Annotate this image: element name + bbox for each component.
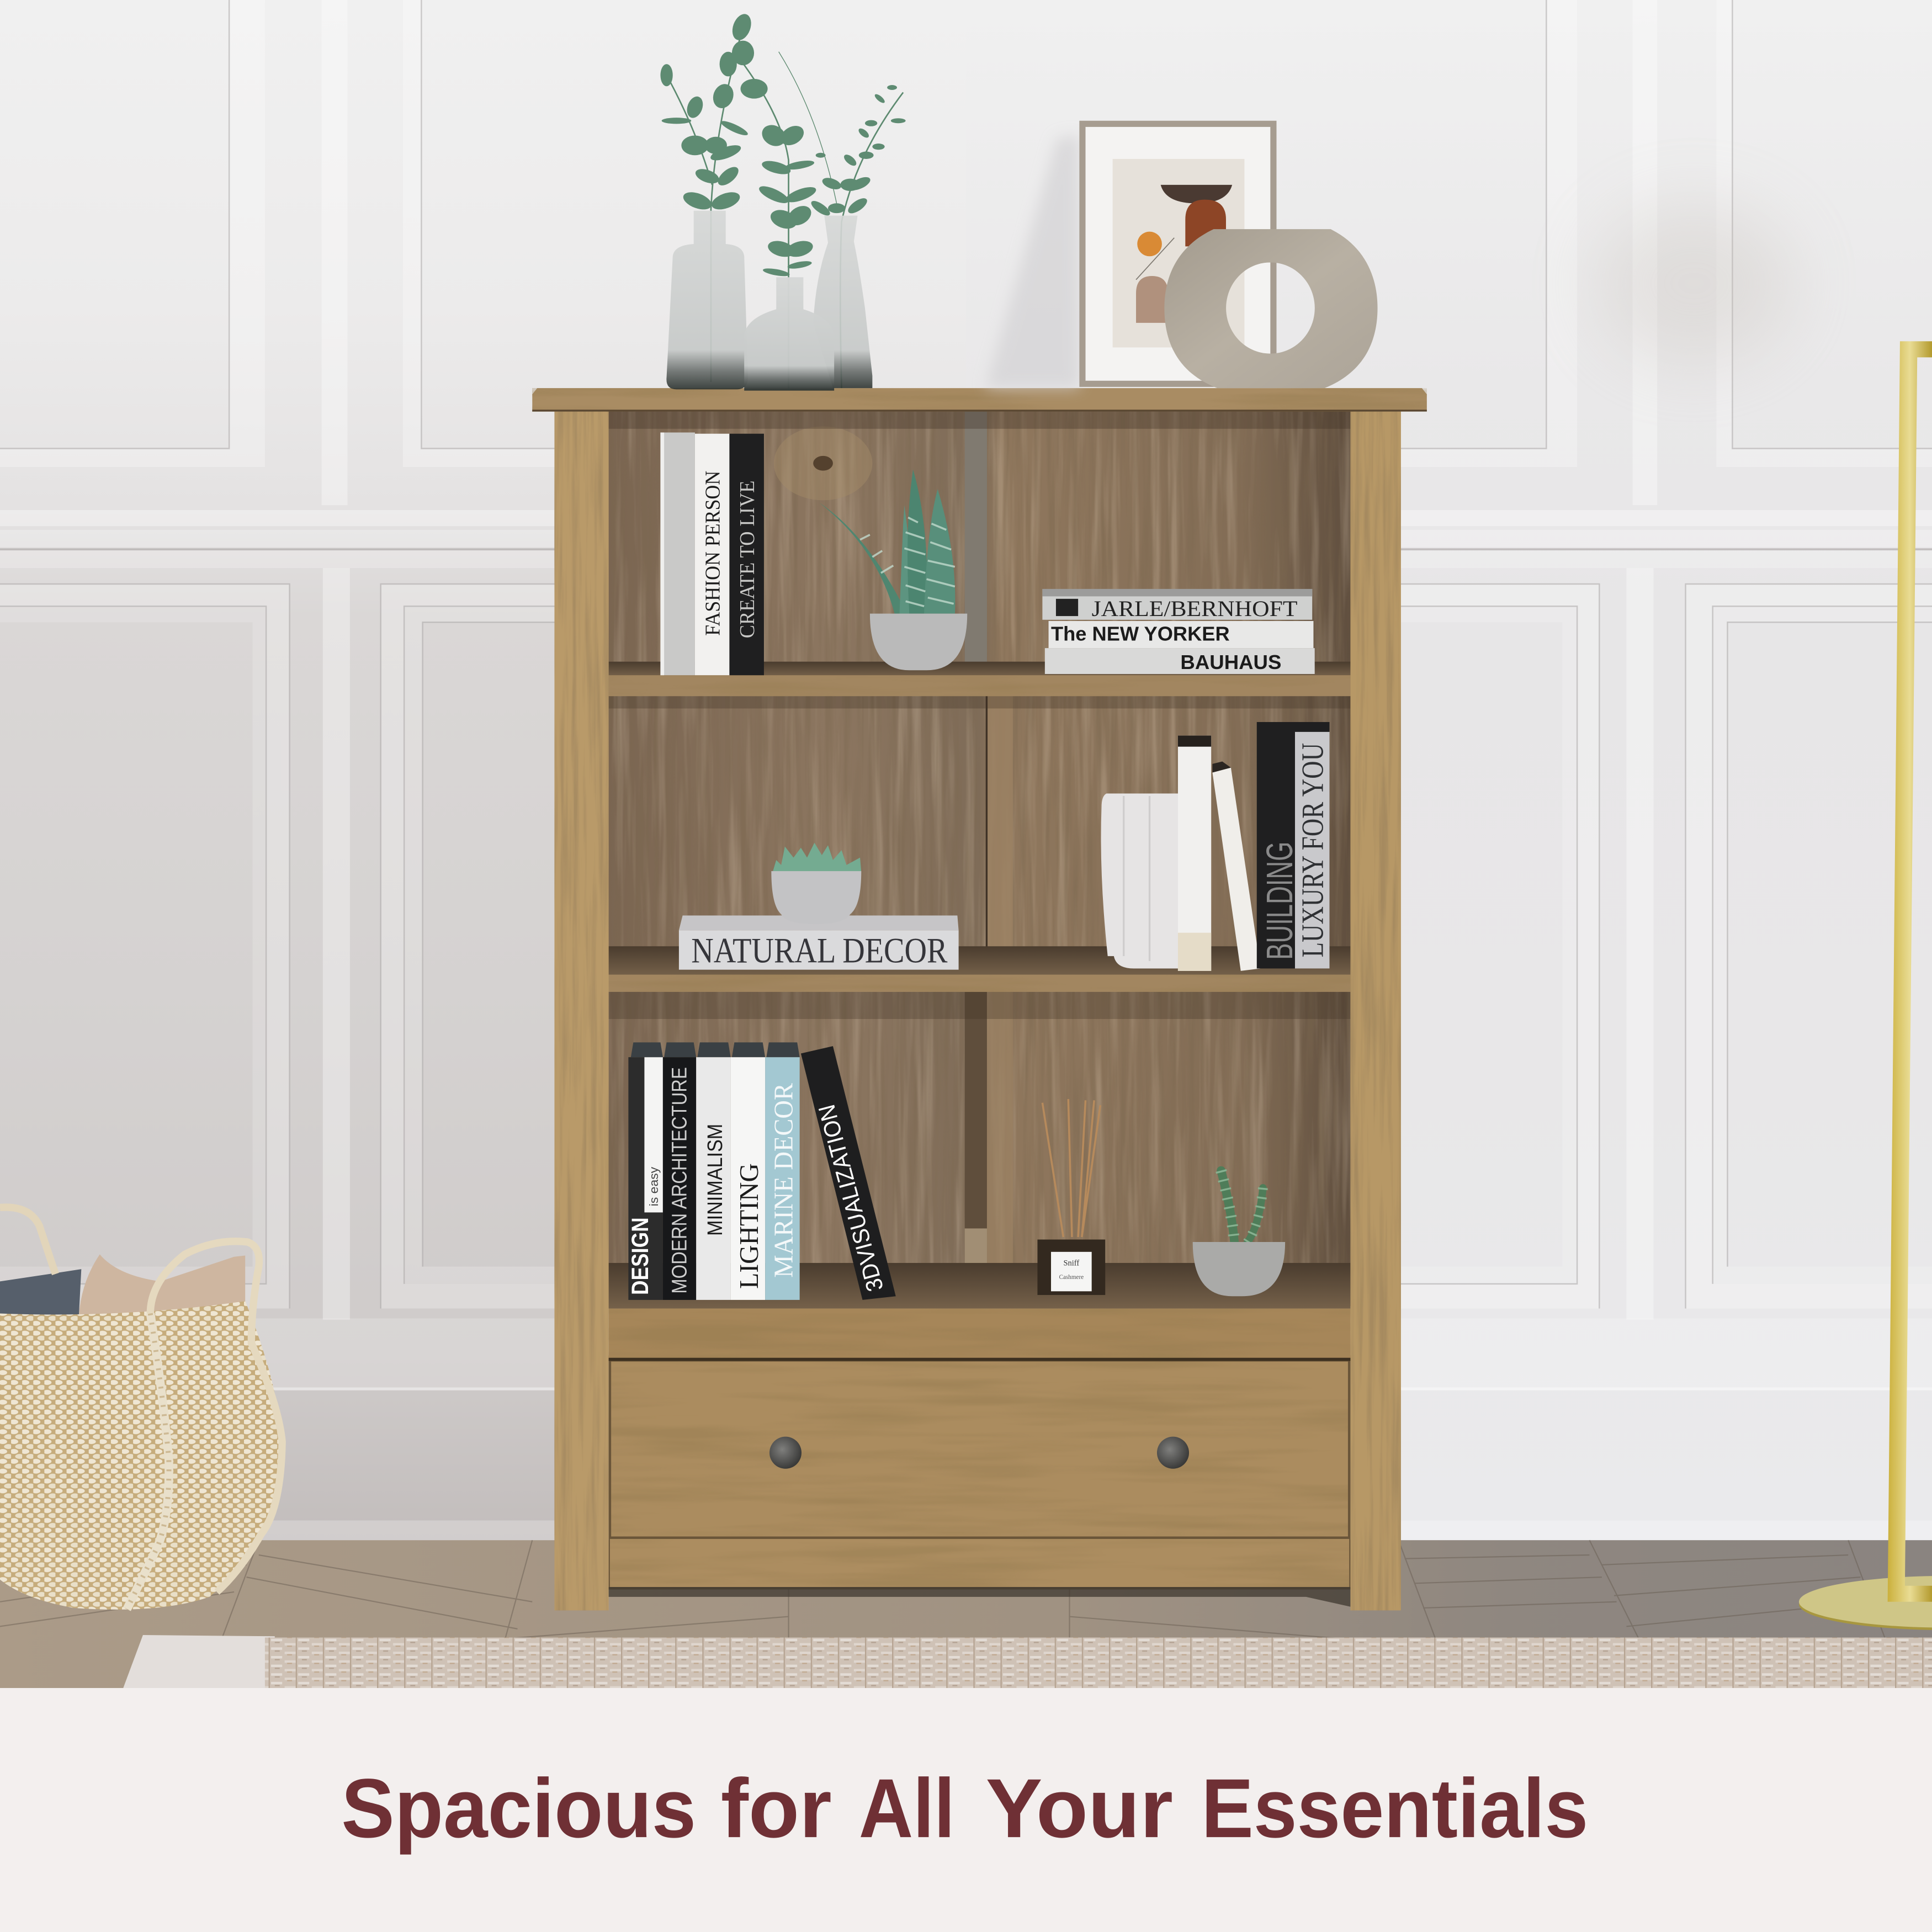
wall shadow of frame — [986, 136, 1079, 388]
drawer knob right — [1157, 1437, 1189, 1469]
rail above drawer — [609, 1309, 1350, 1361]
small plant in grey pot — [1193, 1171, 1285, 1296]
blanket — [0, 1269, 81, 1316]
title: Spacious — [341, 1762, 696, 1855]
bottom rail — [610, 1539, 1349, 1587]
pillow — [79, 1254, 245, 1316]
book: Fashion Person: FASHION PERSON — [702, 471, 725, 636]
wall shadow right side — [1596, 203, 1793, 363]
stacked books — [1042, 589, 1315, 674]
leaves — [660, 12, 906, 278]
basket body — [0, 1301, 282, 1610]
top board — [532, 388, 1427, 412]
framed abstract art print — [1079, 121, 1276, 387]
book: Bauhaus: BAUHAUS — [1180, 651, 1281, 673]
concrete ring vase — [1164, 229, 1378, 388]
books shelf 1 vertical — [660, 432, 764, 675]
book: Create to Live: CREATE TO LIVE — [736, 481, 759, 638]
pilasters — [322, 0, 1657, 1320]
print shapes — [1161, 185, 1232, 203]
dark backing behind drawer — [609, 1355, 1350, 1589]
vase tall right — [813, 216, 872, 388]
book: The New Yorker: The NEW YORKER — [1051, 623, 1230, 645]
bottom caption band — [0, 1688, 1932, 1932]
shadow under bookcase — [609, 1587, 1350, 1607]
title: for — [721, 1762, 832, 1855]
lamp frame — [1888, 341, 1932, 1602]
label: Sniff: Sniff — [1063, 1259, 1079, 1267]
stems — [667, 27, 903, 389]
book: Building: BUILDING — [1259, 842, 1301, 960]
left side post — [554, 412, 609, 1610]
back handle — [0, 1207, 55, 1274]
baseboard — [0, 1318, 1932, 1540]
book: Jarle/Bernhoft: JARLE/BERNHOFT — [1092, 596, 1297, 621]
shelf 1 — [606, 662, 1350, 696]
book: Design is easy: DESIGN — [627, 1217, 653, 1295]
vase large — [666, 211, 748, 389]
basket — [0, 1207, 282, 1610]
bottom shelf surface — [606, 1263, 1350, 1309]
title: Your — [986, 1762, 1173, 1855]
drawer knob left — [769, 1437, 802, 1469]
back panel — [606, 412, 1353, 1306]
book: Lighting: LIGHTING — [734, 1163, 764, 1289]
title: Essentials — [1201, 1762, 1588, 1855]
vase small — [744, 277, 834, 391]
title — [341, 1762, 1588, 1855]
aloe plant in pot — [819, 469, 967, 670]
chair rail — [0, 510, 1932, 568]
small label: is easy: is easy — [647, 1166, 661, 1206]
book: Modern Architecture: MODERN ARCHITECTURE — [668, 1067, 691, 1294]
marble vase — [1101, 794, 1180, 968]
floor lamp gold stand — [1799, 341, 1932, 1630]
shelf 2 — [606, 946, 1350, 992]
right side post — [1350, 412, 1401, 1610]
books shelf 3 — [627, 1042, 896, 1300]
reed diffuser — [1037, 1099, 1105, 1295]
book: Minimalism: MINIMALISM — [704, 1124, 727, 1236]
wall background — [0, 0, 1932, 1540]
rug — [123, 1635, 1932, 1688]
book: Natural Decor: NATURAL DECOR — [691, 931, 948, 970]
label: Cashmere: Cashmere — [1059, 1274, 1084, 1281]
wall panel mouldings — [0, 0, 1932, 1540]
drawer — [611, 1362, 1348, 1536]
books shelf 2 — [1178, 722, 1330, 971]
book: Marine Decor: MARINE DECOR — [768, 1083, 798, 1278]
book: Natural Decor — [679, 915, 959, 970]
floor — [0, 1540, 1932, 1688]
small succulent on book — [771, 843, 861, 924]
bookcase — [532, 388, 1427, 1610]
book: Luxury for You: LUXURY FOR YOU — [1296, 743, 1330, 957]
title: All — [859, 1762, 955, 1855]
vases with eucalyptus — [660, 12, 906, 391]
book: 3D Visualization: 3DVISUALIZATION — [814, 1102, 888, 1294]
lamp base — [1799, 1578, 1932, 1630]
